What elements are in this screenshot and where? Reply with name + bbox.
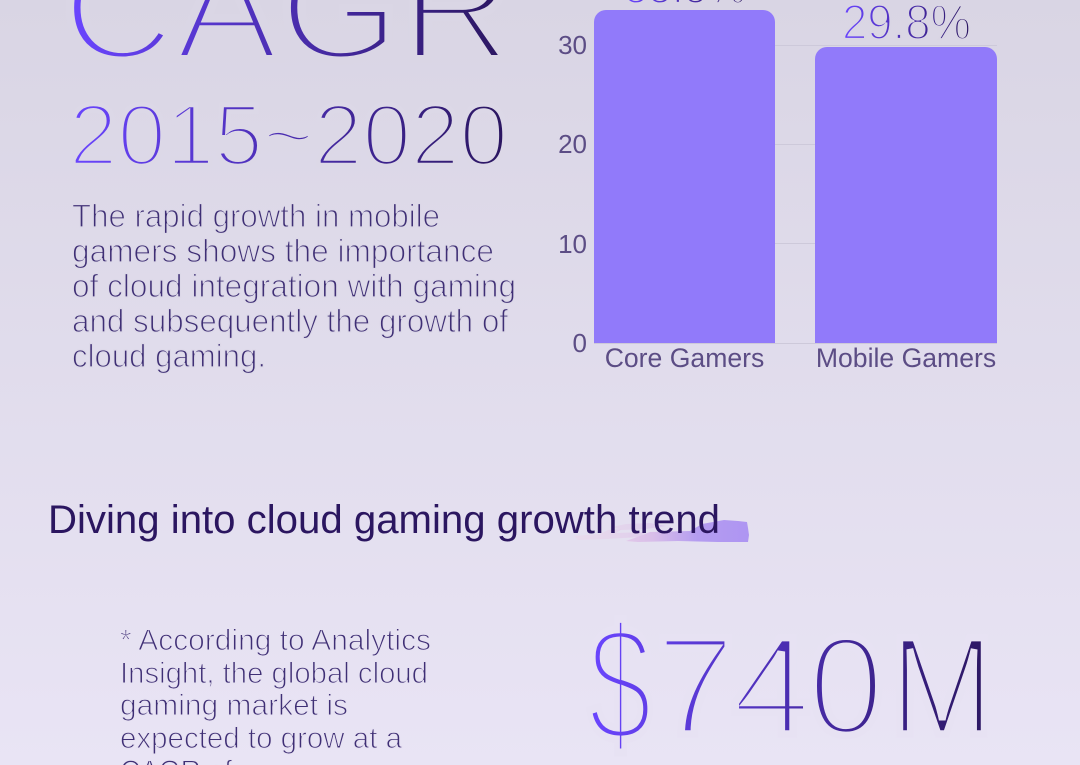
y axis labels: 10 xyxy=(558,229,587,259)
footnote text: expected to grow at a xyxy=(120,722,402,755)
bar: Mobile Gamers xyxy=(815,47,997,343)
text block: mobile gamers description: of cloud integration with gaming xyxy=(72,268,516,304)
section heading: Diving into cloud gaming growth trend xyxy=(48,498,720,542)
text block: mobile gamers description xyxy=(72,198,516,374)
category labels: Mobile Gamers xyxy=(816,343,996,373)
text block: mobile gamers description: cloud gaming. xyxy=(72,338,266,374)
footnote text: gaming market is xyxy=(120,689,348,722)
subtitle: year range: 2015~2020 xyxy=(69,87,508,184)
category labels: Core Gamers xyxy=(605,343,764,373)
bar: Core Gamers xyxy=(594,10,775,343)
category labels xyxy=(605,343,996,373)
big number xyxy=(588,592,994,765)
y axis labels: 30 xyxy=(558,30,587,60)
bar chart: CAGR by gamer type xyxy=(558,0,997,373)
y axis labels xyxy=(558,30,587,358)
big number: 4 xyxy=(732,607,811,764)
big number: M xyxy=(890,607,994,764)
brush stroke highlight xyxy=(574,520,749,542)
text block: mobile gamers description: gamers shows the importance xyxy=(72,233,494,269)
y axis labels: 0 xyxy=(573,328,587,358)
footnote text: Insight, the global cloud xyxy=(120,657,428,690)
y axis labels: 20 xyxy=(558,129,587,159)
text block: mobile gamers description: and subsequently the growth of xyxy=(72,303,508,339)
big number: 7 xyxy=(656,607,736,764)
big number: 0 xyxy=(808,607,884,764)
text block: mobile gamers description: The rapid growth in mobile xyxy=(72,198,440,234)
footnote text: * According to Analytics xyxy=(120,624,431,657)
footnote text xyxy=(120,624,431,765)
